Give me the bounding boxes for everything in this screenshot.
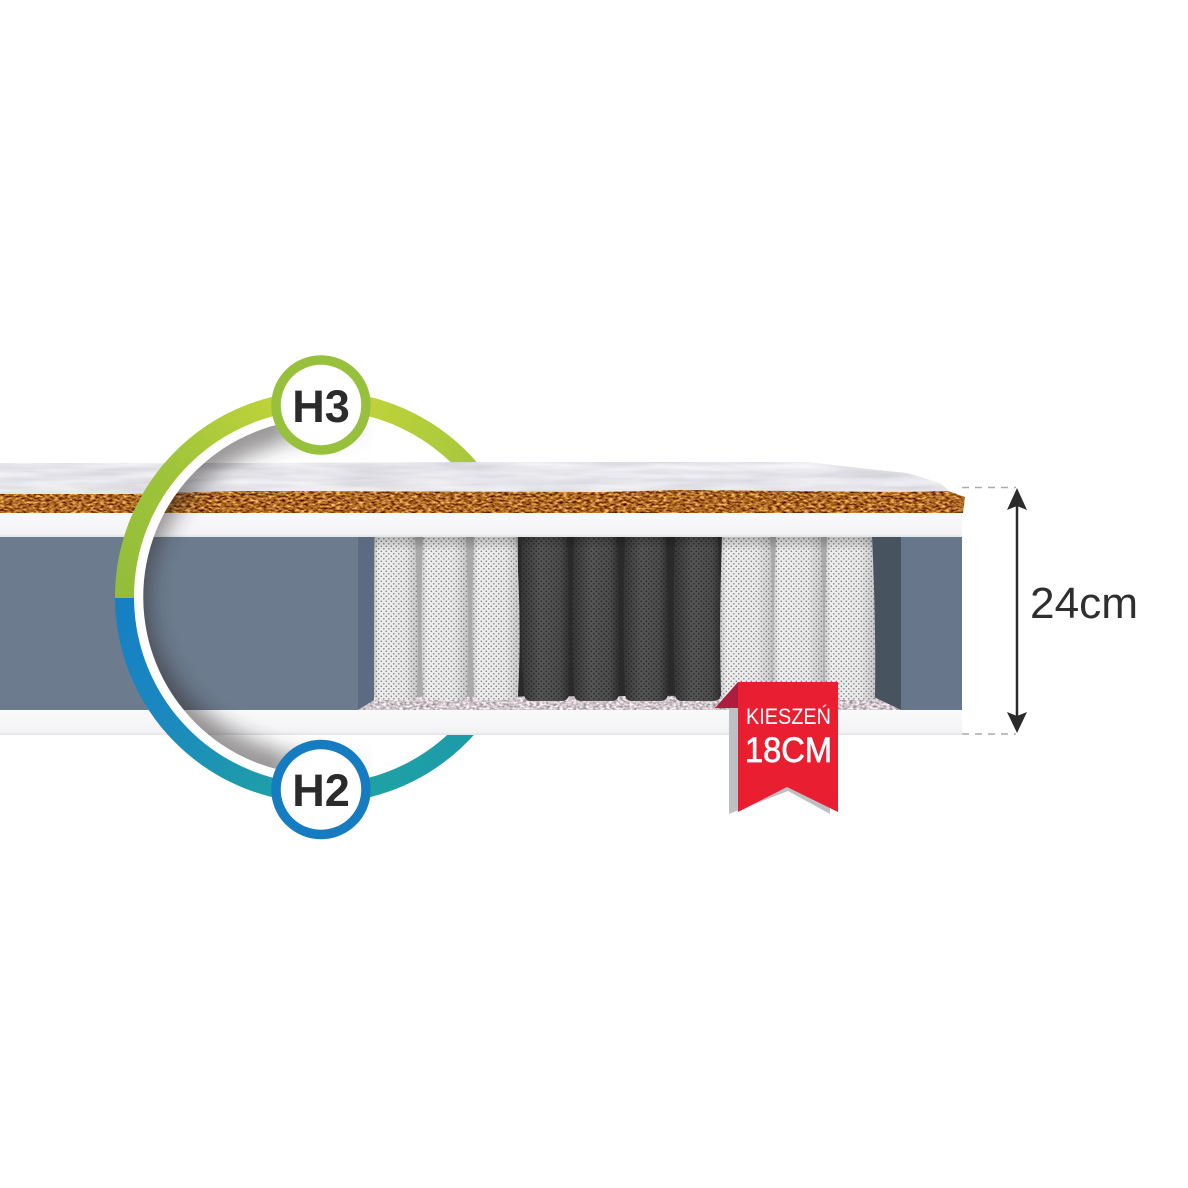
- infographic: mattress cross-section: [0, 355, 1136, 840]
- mattress cross-section: [0, 462, 965, 735]
- badge: H3: H3: [292, 381, 350, 432]
- white pocket springs, left group: [374, 537, 520, 700]
- ribbon: pocket spring height: KIESZEŃ: [746, 704, 831, 729]
- top cover layer: [0, 462, 953, 494]
- bottom white foam layer: [0, 710, 962, 735]
- right foam block: [872, 537, 962, 710]
- interior backing: [358, 537, 878, 697]
- coir layer: [0, 490, 965, 513]
- dimension: mattress height: [962, 488, 1138, 734]
- ribbon: pocket spring height: [715, 682, 838, 814]
- ring: left half, H2 side: [124, 598, 321, 794]
- dimension: mattress height: 24cm: [1030, 579, 1138, 628]
- left foam block: [0, 537, 374, 710]
- ribbon: pocket spring height: 18CM: [745, 731, 832, 770]
- badge: H2: [276, 744, 366, 834]
- ring: left half, H3 side: [124, 400, 321, 598]
- ring: right half behind the mattress: [321, 400, 500, 794]
- inner shadow of the firmness ring: [143, 425, 366, 769]
- dark pocket springs, centre group: [521, 537, 721, 701]
- white pocket springs, right group: [720, 537, 875, 700]
- badge: H3: [276, 360, 366, 450]
- ring: white inner band: [138, 414, 321, 780]
- base mesh layer: [358, 695, 905, 710]
- top white foam layer: [0, 513, 962, 537]
- badge: H2: H2: [292, 765, 350, 816]
